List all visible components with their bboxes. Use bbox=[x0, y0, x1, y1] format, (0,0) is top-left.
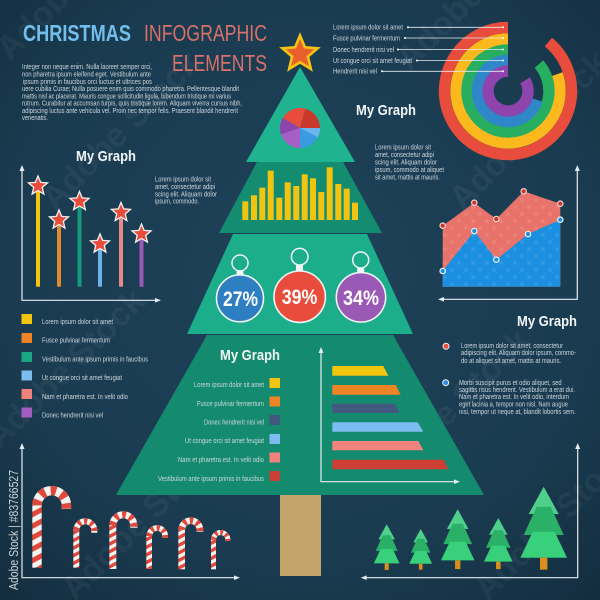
area chart bbox=[438, 165, 580, 302]
horizontal bar chart in tree bbox=[318, 347, 460, 484]
heading: My Graph top right: My Graph bbox=[356, 102, 416, 119]
text block: blue bullet: eget lacinia a, tempor non nisl. Nam augue bbox=[459, 402, 568, 408]
intro text block: ipsum primis in faucibus orci luctus et ultrices pos bbox=[23, 79, 152, 86]
ring chart bbox=[445, 28, 572, 154]
title bbox=[23, 20, 267, 76]
title: INFOGRAPHIC bbox=[144, 20, 267, 46]
ring chart legend: Ut congue orci sit amet feugiat bbox=[333, 58, 412, 65]
ring chart legend bbox=[333, 24, 504, 76]
text block: blue bullet: nisi, tempor ut neque at, blandit lobortis sem. bbox=[459, 409, 576, 416]
candy cane 3 bbox=[109, 515, 134, 569]
ring chart legend: Fusce pulvinar fermentum bbox=[333, 36, 400, 42]
candy cane chart bbox=[20, 443, 240, 580]
ornament: 27% bbox=[216, 255, 264, 322]
tree tier 3 bbox=[187, 234, 413, 334]
ring chart legend: Donec hendrerit nisi vel bbox=[333, 47, 394, 54]
tree legend: Vestibulum ante ipsum primis in faucibus bbox=[158, 476, 264, 483]
star bar chart bbox=[20, 165, 161, 303]
candy cane 4 bbox=[146, 528, 165, 569]
text block: blue bullet: Nam et pharetra est. In velit odio, interdum bbox=[459, 394, 569, 401]
heading: My Graph right: My Graph bbox=[517, 313, 577, 330]
christmas tree bbox=[116, 67, 484, 576]
icon: tree star bbox=[282, 36, 318, 69]
intro text block: mattis nisl ac placerat. Mauris congue sollicitudin ligula, bibendum tristique mi varius bbox=[22, 94, 231, 100]
stock credit: Adobe Stock | #83766527 bbox=[7, 470, 21, 590]
ornament: 34% bbox=[336, 252, 386, 322]
ornament: 34%: 34% bbox=[343, 287, 379, 310]
left legend bbox=[22, 314, 148, 420]
text block: left: ipsum, commodo. bbox=[155, 198, 199, 206]
text block: left: Lorem ipsum dolor sit bbox=[155, 176, 211, 184]
left legend: Ut congue orci sit amet feugiat bbox=[42, 375, 122, 382]
tree legend: Nam et pharetra est. In velit odio bbox=[178, 457, 264, 464]
bar chart in tree bbox=[242, 167, 358, 220]
small trees chart bbox=[361, 443, 580, 580]
ornament: 39% bbox=[274, 248, 325, 322]
candy cane 5 bbox=[178, 521, 200, 569]
candy cane 2 bbox=[73, 521, 94, 568]
tree trunk bbox=[280, 495, 321, 576]
watermark: Adobe Stock bbox=[364, 322, 538, 496]
text block: blue bullet bbox=[459, 380, 576, 416]
heading: My Graph in tree: My Graph bbox=[220, 347, 280, 364]
candy cane 6 bbox=[211, 532, 228, 569]
ornament: 27%: 27% bbox=[223, 288, 258, 311]
text block: red bullet: do at aliquet sit amet, mattis at mauris. bbox=[461, 358, 561, 365]
text block: top right: scing elit. Aliquam dolor bbox=[375, 160, 438, 166]
tree tier 4 bbox=[116, 335, 484, 495]
tree legend: Donec hendrerit nisi vel bbox=[204, 420, 264, 426]
heading: My Graph left: My Graph bbox=[76, 148, 136, 165]
text block: red bullet: adipiscing elit. Aliquam dolor ipsum, commo- bbox=[461, 350, 577, 357]
intro text block: Integer non neque enim. Nulla laoreet semper orci, bbox=[22, 64, 152, 71]
tree legend: Ut congue orci sit amet feugiat bbox=[185, 438, 264, 445]
ring chart legend: Hendrerit nisi vel bbox=[333, 68, 377, 76]
pie chart bbox=[280, 108, 320, 148]
text block: top right bbox=[375, 144, 444, 182]
text block: top right: Lorem ipsum dolor sit bbox=[375, 144, 431, 152]
intro text block: rutrum. Curabitur at accumsan turpis, quis tristique lorem. Aliquam viverra cursus nibh, bbox=[22, 100, 242, 108]
intro text block bbox=[22, 64, 242, 122]
text block: blue bullet: sagittis risus hendrerit. Vestibulum a erat dui. bbox=[459, 387, 575, 394]
left legend: Fusce pulvinar fermentum bbox=[42, 338, 110, 344]
candy cane 1 bbox=[32, 491, 66, 568]
text block: left: scing elit. Aliquam dolor bbox=[155, 192, 218, 198]
text block: red bullet: Lorem ipsum dolor sit amet, consectetur bbox=[461, 343, 564, 350]
bullet: blue bbox=[443, 380, 449, 386]
title: ELEMENTS bbox=[172, 50, 267, 76]
left legend: Donec hendrerit nisi vel bbox=[42, 412, 103, 420]
tree legend: Fusce pulvinar fermentum bbox=[197, 401, 264, 408]
text block: top right: ipsum, commodo at aliquet bbox=[375, 167, 444, 174]
text block: left: amet, consectetur adipi bbox=[155, 184, 215, 191]
tree legend: Lorem ipsum dolor sit amet bbox=[194, 382, 264, 389]
intro text block: adipiscing luctus ante vehicula vel. Proin nec tempor felis. Praesent blandit hendrerit bbox=[22, 108, 238, 115]
text block: top right: amet, consectetur adipi bbox=[375, 152, 434, 159]
ornament: 39%: 39% bbox=[282, 286, 318, 309]
title: CHRISTMAS bbox=[23, 20, 131, 46]
bullet: red bbox=[443, 343, 449, 349]
intro text block: uere cubilia Curae; Nulla posuere enim quis commodo pharetra. Pellentesque blandit bbox=[22, 86, 239, 93]
watermark: Adobe Stock bbox=[34, 44, 208, 218]
tree tier 1 bbox=[246, 67, 355, 162]
text block: red bullet bbox=[461, 343, 577, 365]
tree legend bbox=[158, 378, 280, 483]
intro text block: non pharetra ipsum eleifend eget. Vestibulum ante bbox=[22, 72, 151, 78]
left legend: Vestibulum ante ipsum primis in faucibus bbox=[42, 356, 148, 364]
left legend: Lorem ipsum dolor sit amet bbox=[42, 319, 113, 326]
intro text block: venenatis. bbox=[22, 115, 48, 122]
text block: left bbox=[155, 176, 218, 206]
text block: top right: sit amet, mattis at mauris. bbox=[375, 174, 440, 182]
left legend: Nam et pharetra est. In velit odio bbox=[42, 394, 128, 401]
tree tier 2 bbox=[219, 160, 382, 233]
text block: blue bullet: Morbi suscipit purus et odio aliquet, sed bbox=[459, 380, 562, 387]
ring chart legend: Lorem ipsum dolor sit amet bbox=[333, 24, 403, 32]
